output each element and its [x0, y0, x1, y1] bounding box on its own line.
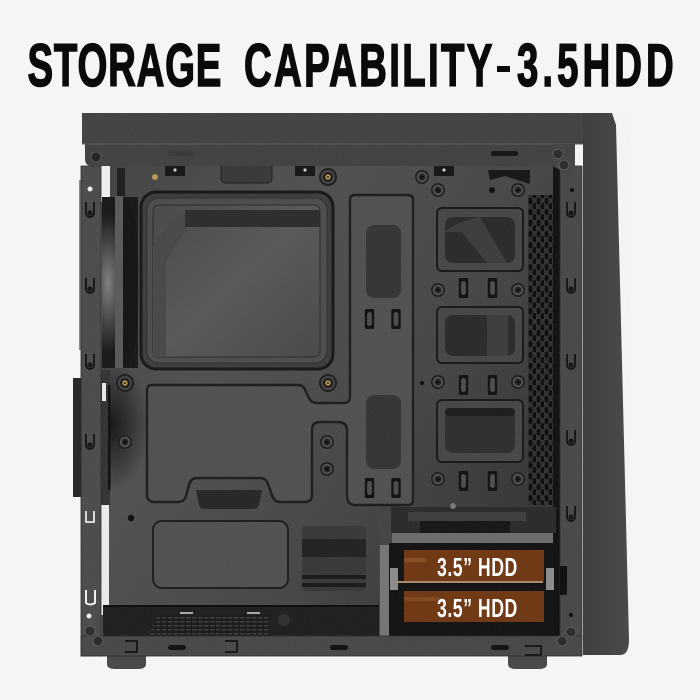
surface grain: [82, 113, 629, 656]
rear fan: [88, 168, 138, 368]
drive clips: [390, 566, 567, 595]
rubber feet: [107, 655, 547, 669]
column slots: [365, 225, 401, 498]
left rail: [81, 166, 101, 656]
title: [28, 31, 674, 99]
drive cage upper: [391, 503, 556, 533]
top tabs and notch: [165, 160, 530, 184]
hard drive label 1: [404, 550, 544, 582]
stamped outline lower panel and column: [147, 195, 413, 505]
hard drive label 1: 3.5” HDD: [437, 553, 517, 582]
title: CAPABILITY: [244, 31, 492, 99]
hard drive label 2: 3.5” HDD: [437, 594, 517, 623]
interior back wall: [74, 166, 561, 638]
title: 3.5HDD: [517, 31, 674, 99]
drive mounting slots: [459, 278, 497, 491]
side bracket on the rear: [73, 180, 82, 497]
corner screws: [85, 626, 576, 646]
lower recess: [153, 521, 288, 588]
vent opening: [302, 526, 366, 591]
bottom rail: [81, 636, 582, 656]
front panel: [583, 113, 629, 655]
right rail: [560, 166, 582, 640]
right mesh panel: [528, 166, 560, 640]
screws and standoffs: [116, 168, 525, 521]
case floor: [103, 512, 391, 636]
computer case: [73, 113, 629, 669]
hard drive label 2: [404, 591, 544, 623]
drive cage with hard drives: [380, 533, 567, 636]
right drive openings: [437, 208, 523, 462]
large recessed panel: [141, 192, 333, 369]
top panel: [82, 113, 583, 174]
handle cutout: [196, 490, 262, 509]
title: STORAGE: [28, 31, 221, 99]
